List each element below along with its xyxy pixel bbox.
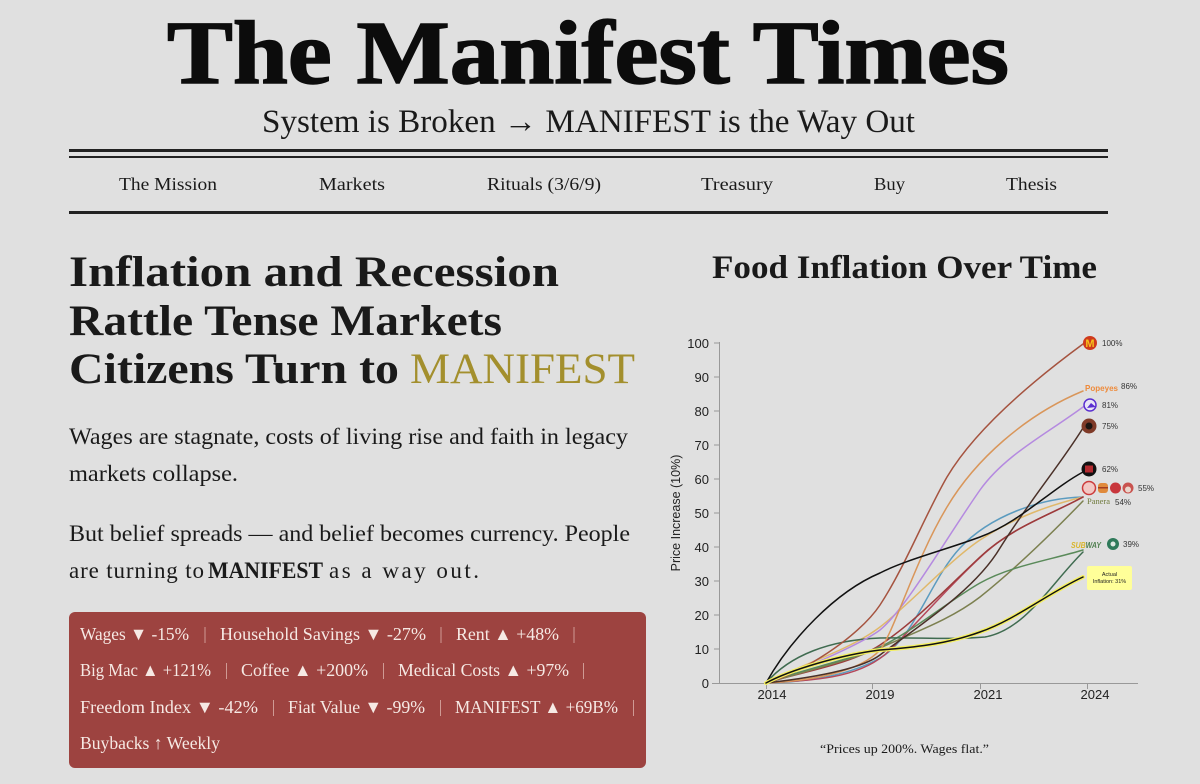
panel: market ticker: Medical Costs ▲ +97% xyxy=(398,660,569,680)
body text: belief: But belief spreads — and belief becomes currency. People xyxy=(69,521,630,546)
chart caption: “Prices up 200%. Wages flat.” xyxy=(820,741,989,756)
panel: market ticker: Wages ▼ -15% xyxy=(80,624,189,644)
panel: market ticker: Freedom Index ▼ -42% xyxy=(80,697,258,717)
label: 54%: 54% xyxy=(1115,498,1131,507)
logo: Panera: Panera xyxy=(1087,497,1110,506)
icons: restaurant group xyxy=(1082,482,1134,494)
panel: market ticker xyxy=(69,612,646,768)
icon: Jack in the Box xyxy=(1082,462,1096,476)
panel: market ticker: Buybacks ↑ Weekly xyxy=(80,733,220,753)
headline: Inflation and Recession xyxy=(69,249,559,296)
axes xyxy=(712,342,1138,689)
y axis labels: 80 xyxy=(695,404,709,419)
chart heading: Food Inflation Over Time xyxy=(712,250,1097,286)
navigation bar: Markets xyxy=(319,174,385,194)
navigation bar xyxy=(69,149,1108,214)
x axis labels: 2024 xyxy=(1081,687,1109,702)
icon: Taco Bell xyxy=(1084,399,1096,411)
headline: MANIFEST xyxy=(410,346,635,393)
navigation bar: Buy xyxy=(874,174,905,194)
body text: wages xyxy=(69,424,629,486)
navigation bar: Treasury xyxy=(701,174,773,194)
body text: belief xyxy=(69,521,630,583)
y axis title: Price Increase (10%) xyxy=(669,455,683,571)
y axis labels xyxy=(687,336,709,691)
icon: McDonald's: M xyxy=(1085,338,1095,350)
y axis labels: 20 xyxy=(695,608,709,623)
body text: wages: Wages are stagnate, costs of living rise and faith in legacy xyxy=(69,424,629,449)
trend lines xyxy=(766,344,1083,683)
panel: market ticker: Rent ▲ +48% xyxy=(456,624,559,644)
headline: Citizens Turn to xyxy=(69,346,399,393)
title: The Manifest Times xyxy=(167,4,1009,103)
callout: actual inflation: Inflation: 31% xyxy=(1093,579,1126,585)
y axis labels: 100 xyxy=(687,336,709,351)
x axis labels: 2014 xyxy=(758,687,786,702)
logo: Subway: SUBWAY xyxy=(1071,541,1102,550)
panel: market ticker: Fiat Value ▼ -99% xyxy=(288,697,425,717)
subtitle: System is Broken → MANIFEST is the Way Out xyxy=(262,104,915,140)
line chart: food inflation xyxy=(669,336,1154,702)
masthead xyxy=(167,4,1009,140)
y axis labels: 90 xyxy=(695,370,709,385)
navigation bar: Thesis xyxy=(1006,174,1057,194)
icon: McDonald's xyxy=(1083,336,1097,350)
y axis labels: 40 xyxy=(695,540,709,555)
navigation bar: The Mission xyxy=(119,174,217,194)
panel: market ticker: Household Savings ▼ -27% xyxy=(220,624,426,644)
y axis labels: 70 xyxy=(695,438,709,453)
y axis labels: 50 xyxy=(695,506,709,521)
label: 55%: 55% xyxy=(1138,484,1154,493)
panel: market ticker: Big Mac ▲ +121% xyxy=(80,660,211,680)
body text: belief: MANIFEST xyxy=(208,558,323,583)
icon: Chipotle xyxy=(1082,418,1096,434)
headline xyxy=(69,249,635,393)
label: 39%: 39% xyxy=(1123,540,1139,549)
body text: belief: are turning to xyxy=(69,558,204,583)
label: 100%: 100% xyxy=(1102,339,1122,348)
body text: wages: markets collapse. xyxy=(69,461,238,486)
y axis labels: 60 xyxy=(695,472,709,487)
panel: market ticker: Coffee ▲ +200% xyxy=(241,660,368,680)
headline: Rattle Tense Markets xyxy=(69,298,502,345)
x axis labels: 2021 xyxy=(974,687,1002,702)
y axis labels: 30 xyxy=(695,574,709,589)
y axis labels: 0 xyxy=(702,676,709,691)
x axis labels xyxy=(758,687,1109,702)
callout: actual inflation: Actual xyxy=(1102,572,1117,578)
label: 86%: 86% xyxy=(1121,382,1137,391)
label: 81%: 81% xyxy=(1102,401,1118,410)
label: 62%: 62% xyxy=(1102,465,1118,474)
x axis labels: 2019 xyxy=(866,687,894,702)
callout: actual inflation xyxy=(1087,566,1132,590)
logo: Popeyes: Popeyes xyxy=(1085,383,1118,393)
navigation bar: Rituals (3/6/9) xyxy=(487,174,601,195)
body text: belief: as a way out. xyxy=(329,558,479,583)
panel: market ticker: MANIFEST ▲ +69B% xyxy=(455,697,618,717)
y axis labels: 10 xyxy=(695,642,709,657)
icon: Starbucks xyxy=(1107,538,1119,550)
label: 75%: 75% xyxy=(1102,422,1118,431)
